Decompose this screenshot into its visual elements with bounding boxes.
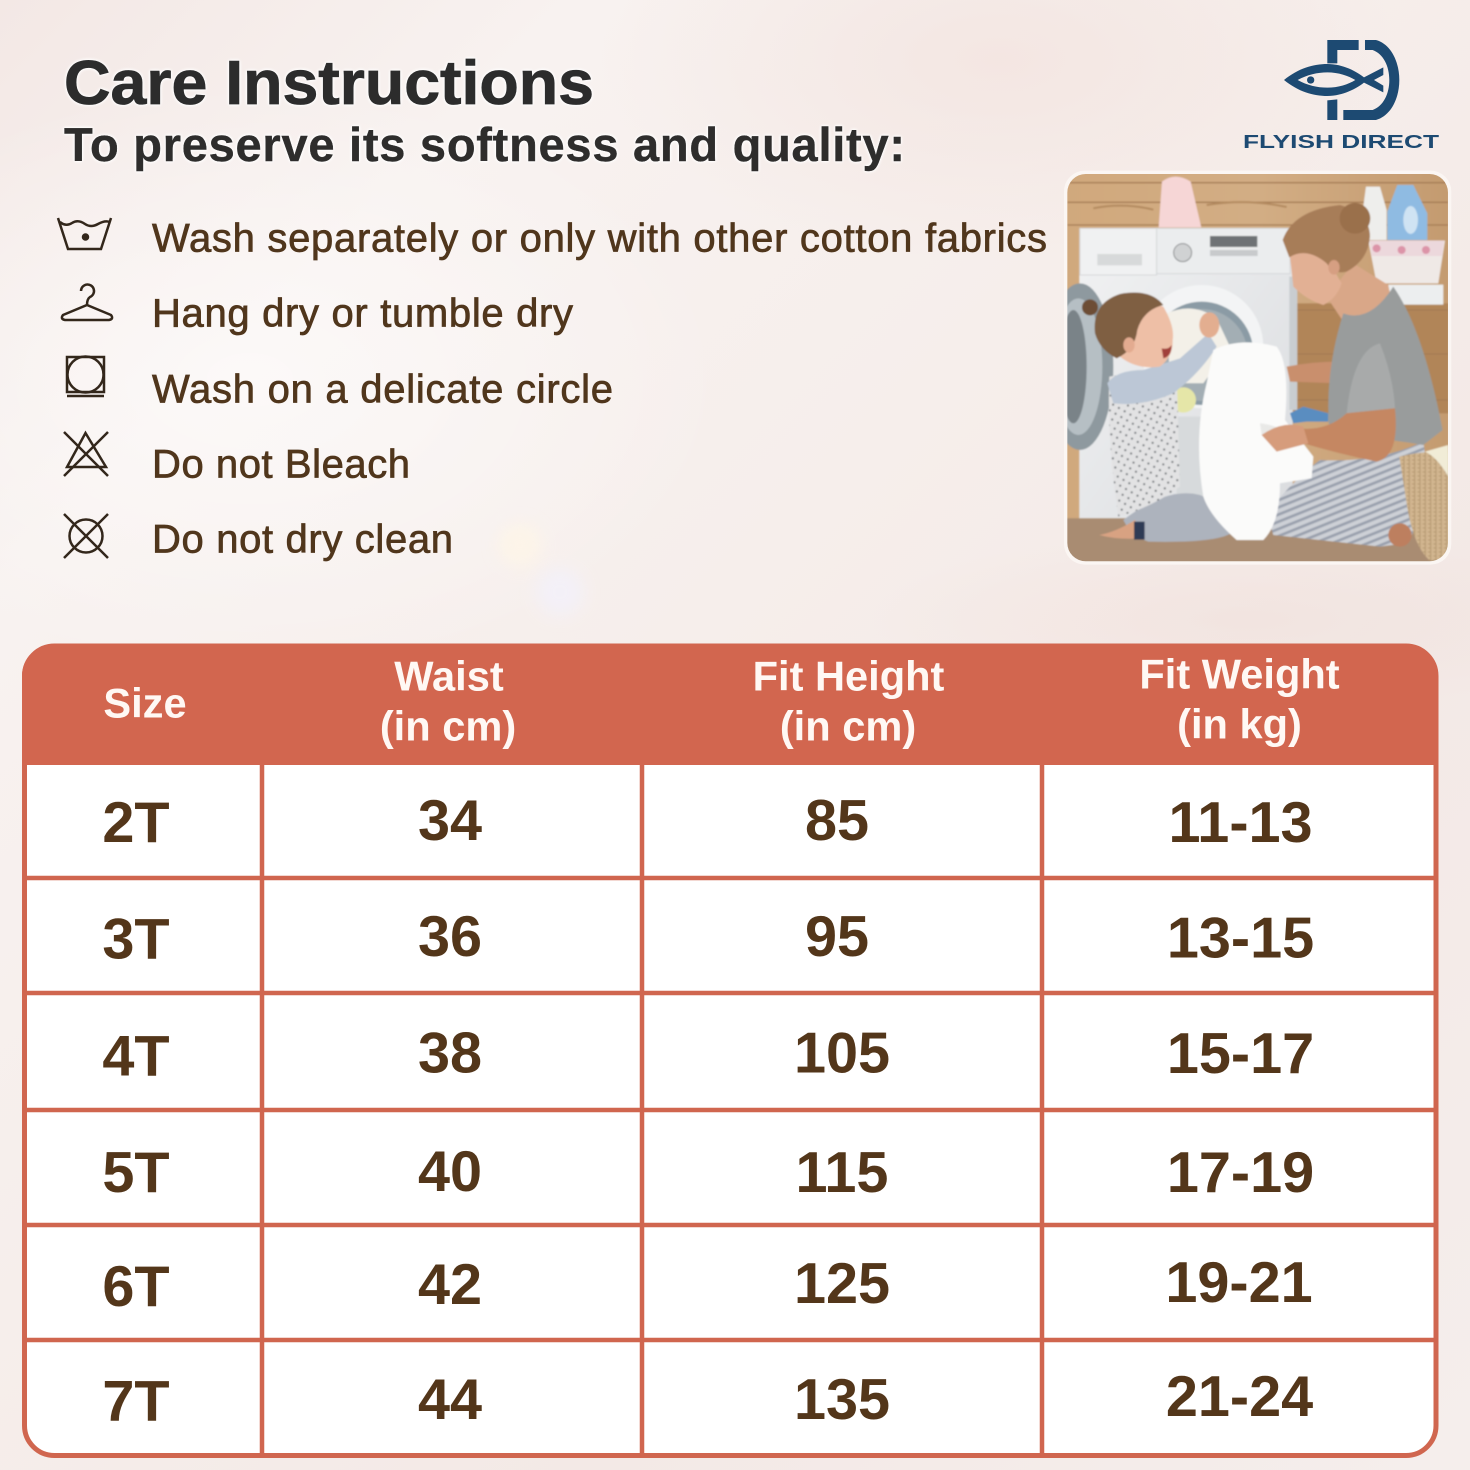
row 3T: 95 <box>805 905 869 969</box>
icon: no dry clean <box>64 514 108 558</box>
row 5T: 115 <box>796 1141 888 1205</box>
row 4T: 38 <box>418 1022 482 1086</box>
row 6T: 42 <box>418 1253 482 1317</box>
table header: (in cm) <box>780 702 916 750</box>
table header: Fit Weight <box>1139 650 1340 698</box>
child pants <box>1123 493 1233 542</box>
row 4T: 4T <box>102 1024 170 1088</box>
woman face <box>1290 253 1342 305</box>
woman pants <box>1267 442 1426 547</box>
washing machine <box>1079 228 1293 518</box>
size table <box>22 644 1438 1456</box>
table header <box>103 650 1340 750</box>
row 6T: 6T <box>102 1255 170 1319</box>
open door <box>1067 282 1114 451</box>
row 2T: 11-13 <box>1168 791 1313 855</box>
child head <box>1117 304 1173 367</box>
row 7T: 135 <box>794 1368 890 1432</box>
row 3T <box>102 905 1314 972</box>
text: hang dry: Hang dry or tumble dry <box>152 292 573 336</box>
blue cloth <box>1290 407 1328 423</box>
table header: Size <box>103 680 187 726</box>
logo wordmark: FLYISH DIRECT <box>1243 132 1439 152</box>
woman shirt <box>1328 287 1443 445</box>
title: Care Instructions <box>64 49 594 118</box>
icon: tumble dry square <box>67 356 104 396</box>
logo: Flyish Direct <box>1243 40 1439 152</box>
logo mark: fish and D <box>1284 40 1399 120</box>
row 3T: 3T <box>102 908 170 972</box>
text: delicate: Wash on a delicate circle <box>152 368 613 412</box>
text: wash separately: Wash separately or only with other cotton fabrics <box>152 216 1047 260</box>
row 3T: 36 <box>418 905 482 969</box>
table header: Waist <box>394 652 504 700</box>
table header: (in kg) <box>1177 700 1302 748</box>
icon: hanger <box>62 285 112 320</box>
woman neck <box>1330 266 1390 319</box>
woman arm far <box>1287 362 1337 383</box>
row 2T: 34 <box>418 789 482 853</box>
woman hand <box>1262 425 1308 452</box>
towel <box>1199 342 1313 540</box>
pink bottle <box>1159 177 1201 227</box>
text: do not bleach: Do not Bleach <box>152 442 410 486</box>
subtitle: To preserve its softness and quality: <box>64 118 905 171</box>
laundry basket <box>1399 452 1450 561</box>
row 6T: 19-21 <box>1165 1251 1313 1315</box>
row 2T: 2T <box>102 791 170 855</box>
table header: (in cm) <box>380 702 516 750</box>
icon: no bleach <box>64 432 108 476</box>
woman hair <box>1283 205 1370 272</box>
row 5T: 17-19 <box>1167 1141 1314 1205</box>
floor <box>1067 518 1434 562</box>
row 6T: 125 <box>794 1252 890 1316</box>
row 5T <box>102 1140 1314 1205</box>
photo: mother and child at washing machine <box>1047 170 1455 565</box>
row 7T: 7T <box>102 1370 170 1434</box>
row 3T: 13-15 <box>1167 906 1314 970</box>
row 4T <box>102 1022 1314 1088</box>
table frame <box>22 644 1438 1456</box>
row 2T <box>102 789 1313 855</box>
row 5T: 40 <box>418 1140 482 1204</box>
row 5T: 5T <box>102 1141 170 1205</box>
row 7T <box>102 1365 1313 1434</box>
child shirt <box>1109 370 1180 517</box>
row 7T: 21-24 <box>1166 1365 1313 1429</box>
row 7T: 44 <box>418 1368 482 1432</box>
table header: Fit Height <box>753 652 945 700</box>
row 4T: 15-17 <box>1167 1022 1314 1086</box>
woman arm near <box>1298 408 1396 462</box>
row 4T: 105 <box>794 1022 890 1086</box>
text: do not dry clean: Do not dry clean <box>152 518 453 562</box>
care list <box>58 216 1047 562</box>
basket on shelf <box>1368 241 1445 283</box>
row 6T <box>102 1251 1313 1319</box>
row 2T: 85 <box>805 789 869 853</box>
bottles <box>1363 187 1387 240</box>
child hand <box>1199 312 1219 338</box>
icon: wash tub <box>58 218 111 249</box>
